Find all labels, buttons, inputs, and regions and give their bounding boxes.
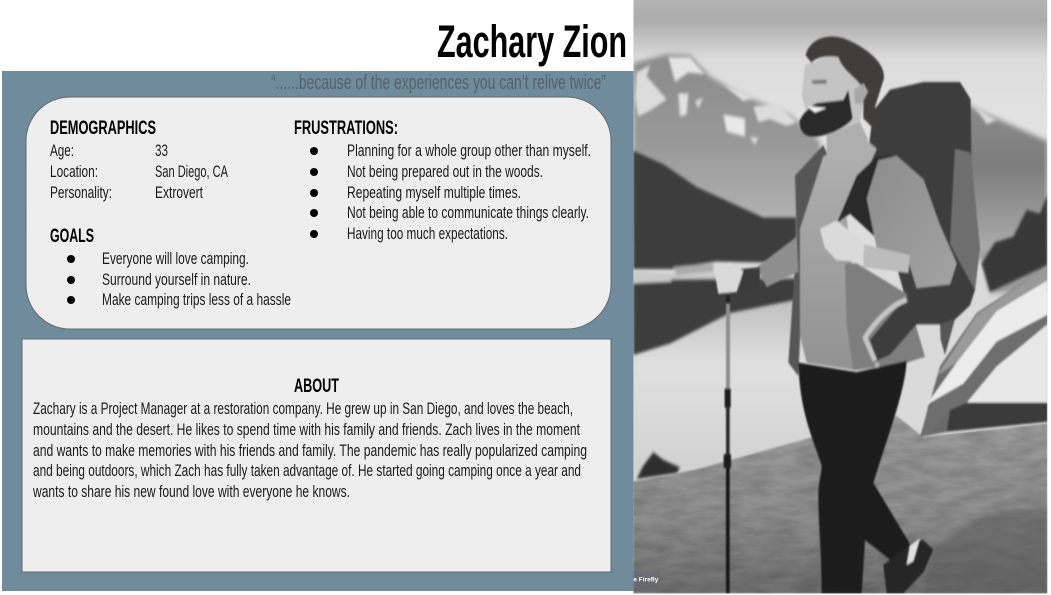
panel: blue background: [2, 71, 634, 591]
hiker: [714, 36, 980, 594]
demographics list: San Diego, CA: [155, 162, 228, 181]
heading: demographics: DEMOGRAPHICS: [50, 117, 156, 139]
goals list: [67, 249, 291, 309]
quote: “......because of the experiences you can’t relive twice”: [271, 71, 606, 94]
demographics list: [50, 141, 228, 202]
demographics list: Location:: [50, 162, 98, 181]
about text: [32, 399, 587, 501]
heading: about: ABOUT: [294, 375, 339, 397]
heading: frustrations: FRUSTRATIONS:: [294, 117, 398, 139]
demographics list: Extrovert: [155, 183, 203, 202]
goals list: Make camping trips less of a hassle: [102, 290, 291, 309]
frustrations list: Planning for a whole group other than myself.: [347, 141, 591, 160]
demographics list: Personality:: [50, 183, 112, 202]
title: Zachary Zion: [437, 16, 627, 67]
goals list: Everyone will love camping.: [102, 249, 249, 268]
frustrations list: Having too much expectations.: [347, 224, 508, 243]
frustrations list: [310, 141, 591, 243]
tent: [920, 266, 1047, 437]
about text: mountains and the desert. He likes to spend time with his family and friends. Zach lives in the moment: [33, 420, 580, 439]
frustrations list: Not being prepared out in the woods.: [347, 162, 543, 181]
about text: wants to share his new found love with everyone he knows.: [32, 482, 350, 501]
firefly watermark: [633, 571, 660, 592]
grass texture: [633, 416, 1047, 594]
panel: profile card: [26, 97, 611, 329]
goals list: Surround yourself in nature.: [102, 270, 251, 289]
heading: goals: GOALS: [50, 225, 94, 247]
demographics list: 33: [155, 141, 168, 160]
firefly watermark: e Firefly: [633, 576, 659, 583]
photo: hiker with backpack by a mountain lake: [633, 0, 1047, 594]
frustrations list: Repeating myself multiple times.: [347, 183, 521, 202]
panel: about: [22, 339, 611, 572]
about text: and being outdoors, which Zach has fully taken advantage of. He started going camping once a year and: [33, 461, 581, 480]
frustrations list: Not being able to communicate things clearly.: [347, 203, 589, 222]
demographics list: Age:: [50, 141, 74, 160]
about text: Zachary is a Project Manager at a restoration company. He grew up in San Diego, and loves the beach,: [33, 399, 573, 418]
about text: and wants to make memories with his friends and family. The pandemic has really popularized camping: [33, 441, 587, 460]
